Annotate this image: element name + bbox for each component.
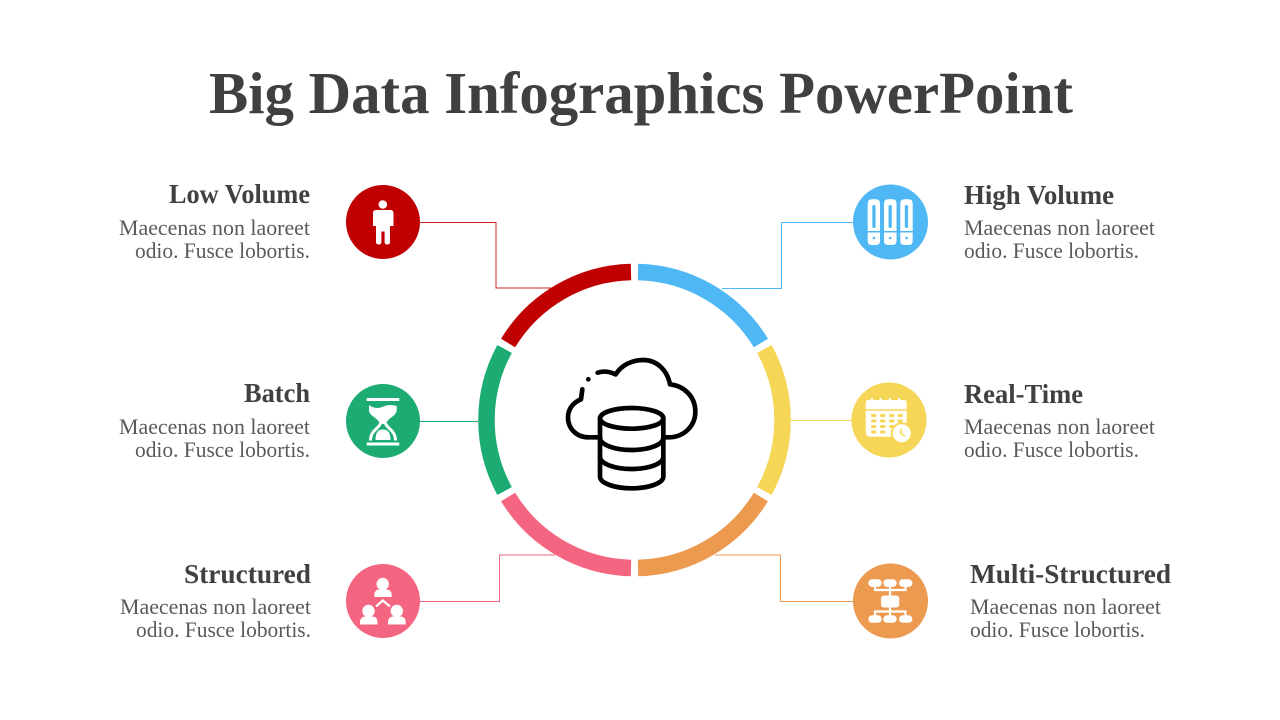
- text: real-time: odio. Fusce lobortis.: [964, 437, 1139, 462]
- item: batch: [119, 378, 420, 462]
- connector: high volume: [722, 222, 853, 288]
- icon: calendar clock: [852, 382, 926, 458]
- heading: structured: Structured: [184, 559, 311, 589]
- heading: real-time: Real-Time: [964, 379, 1083, 409]
- text: multi-structured: Maecenas non laoreet: [970, 594, 1161, 619]
- ring segment: multi-structured: [638, 497, 761, 568]
- ring segment: low volume: [508, 272, 631, 343]
- text: batch: Maecenas non laoreet: [119, 414, 310, 439]
- ring: [486, 272, 783, 568]
- text: multi-structured: odio. Fusce lobortis.: [970, 617, 1145, 642]
- text: high volume: Maecenas non laoreet: [964, 215, 1155, 240]
- icon: binders: [853, 184, 928, 260]
- text: structured: odio. Fusce lobortis.: [136, 617, 311, 642]
- item: structured: [120, 559, 420, 642]
- item: multi-structured: [853, 559, 1171, 642]
- icon: hourglass: [346, 384, 420, 458]
- icon: cloud database: [568, 360, 695, 488]
- text: low volume: Maecenas non laoreet: [119, 215, 310, 240]
- icon: people network: [346, 564, 420, 638]
- heading: low volume: Low Volume: [169, 179, 310, 209]
- ring segment: structured: [508, 497, 631, 568]
- item: real-time: [852, 379, 1155, 462]
- item: high volume: [853, 180, 1155, 263]
- icon: flow hierarchy: [853, 564, 928, 638]
- item: low volume: [119, 179, 420, 263]
- connector: multi-structured: [715, 555, 853, 602]
- connector: batch: [420, 420, 478, 422]
- text: low volume: odio. Fusce lobortis.: [135, 238, 310, 263]
- text: batch: odio. Fusce lobortis.: [135, 437, 310, 462]
- text: structured: Maecenas non laoreet: [120, 594, 311, 619]
- ring segment: batch: [486, 349, 505, 491]
- connector: real-time: [791, 420, 852, 422]
- connector: structured: [420, 555, 555, 602]
- icon: person: [346, 185, 420, 259]
- heading: multi-structured: Multi-Structured: [970, 559, 1171, 589]
- connector: low volume: [420, 222, 552, 288]
- text: real-time: Maecenas non laoreet: [964, 414, 1155, 439]
- title: Big Data Infographics PowerPoint: [209, 60, 1073, 126]
- ring segment: high volume: [638, 272, 761, 343]
- ring segment: real-time: [764, 349, 783, 491]
- heading: batch: Batch: [244, 378, 310, 408]
- text: high volume: odio. Fusce lobortis.: [964, 238, 1139, 263]
- heading: high volume: High Volume: [964, 180, 1114, 210]
